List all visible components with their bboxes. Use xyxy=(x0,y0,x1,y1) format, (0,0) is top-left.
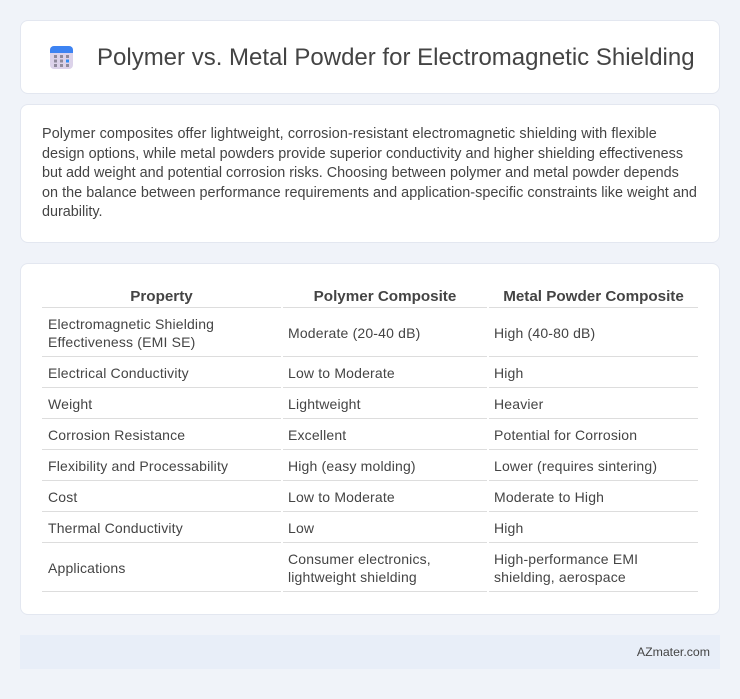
row: corrosion resistance: Potential for Corrosion xyxy=(494,427,637,443)
row: applications: Applications xyxy=(48,560,126,576)
row: corrosion resistance: Corrosion Resistance xyxy=(48,427,185,443)
title: Polymer vs. Metal Powder for Electromagnetic Shielding xyxy=(97,44,695,71)
intro paragraph: design options, while metal powders provide superior conductivity and higher shielding effectiveness xyxy=(42,146,683,162)
table header row: Property xyxy=(130,288,193,305)
row: weight xyxy=(42,396,698,419)
row: electrical conductivity xyxy=(42,365,698,388)
row: corrosion resistance xyxy=(42,427,698,450)
row: applications: Consumer electronics, xyxy=(288,551,431,567)
table header row xyxy=(42,288,698,308)
row: flexibility and processability: Flexibility and Processability xyxy=(48,458,228,474)
row: weight: Weight xyxy=(48,396,92,412)
icon: calendar xyxy=(50,46,73,69)
table header row: Polymer Composite xyxy=(314,288,456,305)
row: cost xyxy=(42,489,698,512)
comparison table panel xyxy=(20,263,720,615)
row: applications: shielding, aerospace xyxy=(494,569,626,585)
header panel xyxy=(20,20,720,94)
row: thermal conductivity xyxy=(42,520,698,543)
intro paragraph: Polymer composites offer lightweight, corrosion-resistant electromagnetic shielding with flexible xyxy=(42,126,657,142)
intro paragraph: but add weight and potential corrosion risks. Choosing between polymer and metal powder depends xyxy=(42,165,679,181)
intro paragraph: durability. xyxy=(42,204,103,220)
row: cost: Cost xyxy=(48,489,77,505)
footer source text: AZmater.com xyxy=(637,645,710,659)
row: flexibility and processability xyxy=(42,458,698,481)
row: EMI SE: High (40-80 dB) xyxy=(494,325,595,341)
row: electrical conductivity: Electrical Conductivity xyxy=(48,365,189,381)
row: electrical conductivity: High xyxy=(494,365,523,381)
footer bar xyxy=(20,635,720,669)
row: weight: Heavier xyxy=(494,396,543,412)
intro text panel xyxy=(20,104,720,243)
table header row: Metal Powder Composite xyxy=(503,288,684,305)
row: applications: High-performance EMI xyxy=(494,551,638,567)
row: cost: Low to Moderate xyxy=(288,489,395,505)
row: EMI SE: Electromagnetic Shielding xyxy=(48,316,214,332)
intro paragraph: on the balance between performance requirements and application-specific constraints like weight and xyxy=(42,185,697,201)
row: thermal conductivity: High xyxy=(494,520,523,536)
intro paragraph xyxy=(42,126,697,220)
row: cost: Moderate to High xyxy=(494,489,604,505)
row: corrosion resistance: Excellent xyxy=(288,427,346,443)
row: EMI SE: Moderate (20-40 dB) xyxy=(288,325,420,341)
row: flexibility and processability: High (easy molding) xyxy=(288,458,416,474)
row: EMI SE: Effectiveness (EMI SE) xyxy=(48,334,195,350)
row: thermal conductivity: Low xyxy=(288,520,314,536)
row: electrical conductivity: Low to Moderate xyxy=(288,365,395,381)
row: flexibility and processability: Lower (requires sintering) xyxy=(494,458,657,474)
row: weight: Lightweight xyxy=(288,396,361,412)
row: applications xyxy=(42,551,698,592)
row: applications: lightweight shielding xyxy=(288,569,417,585)
row: thermal conductivity: Thermal Conductivity xyxy=(48,520,183,536)
row: EMI SE xyxy=(42,316,698,357)
